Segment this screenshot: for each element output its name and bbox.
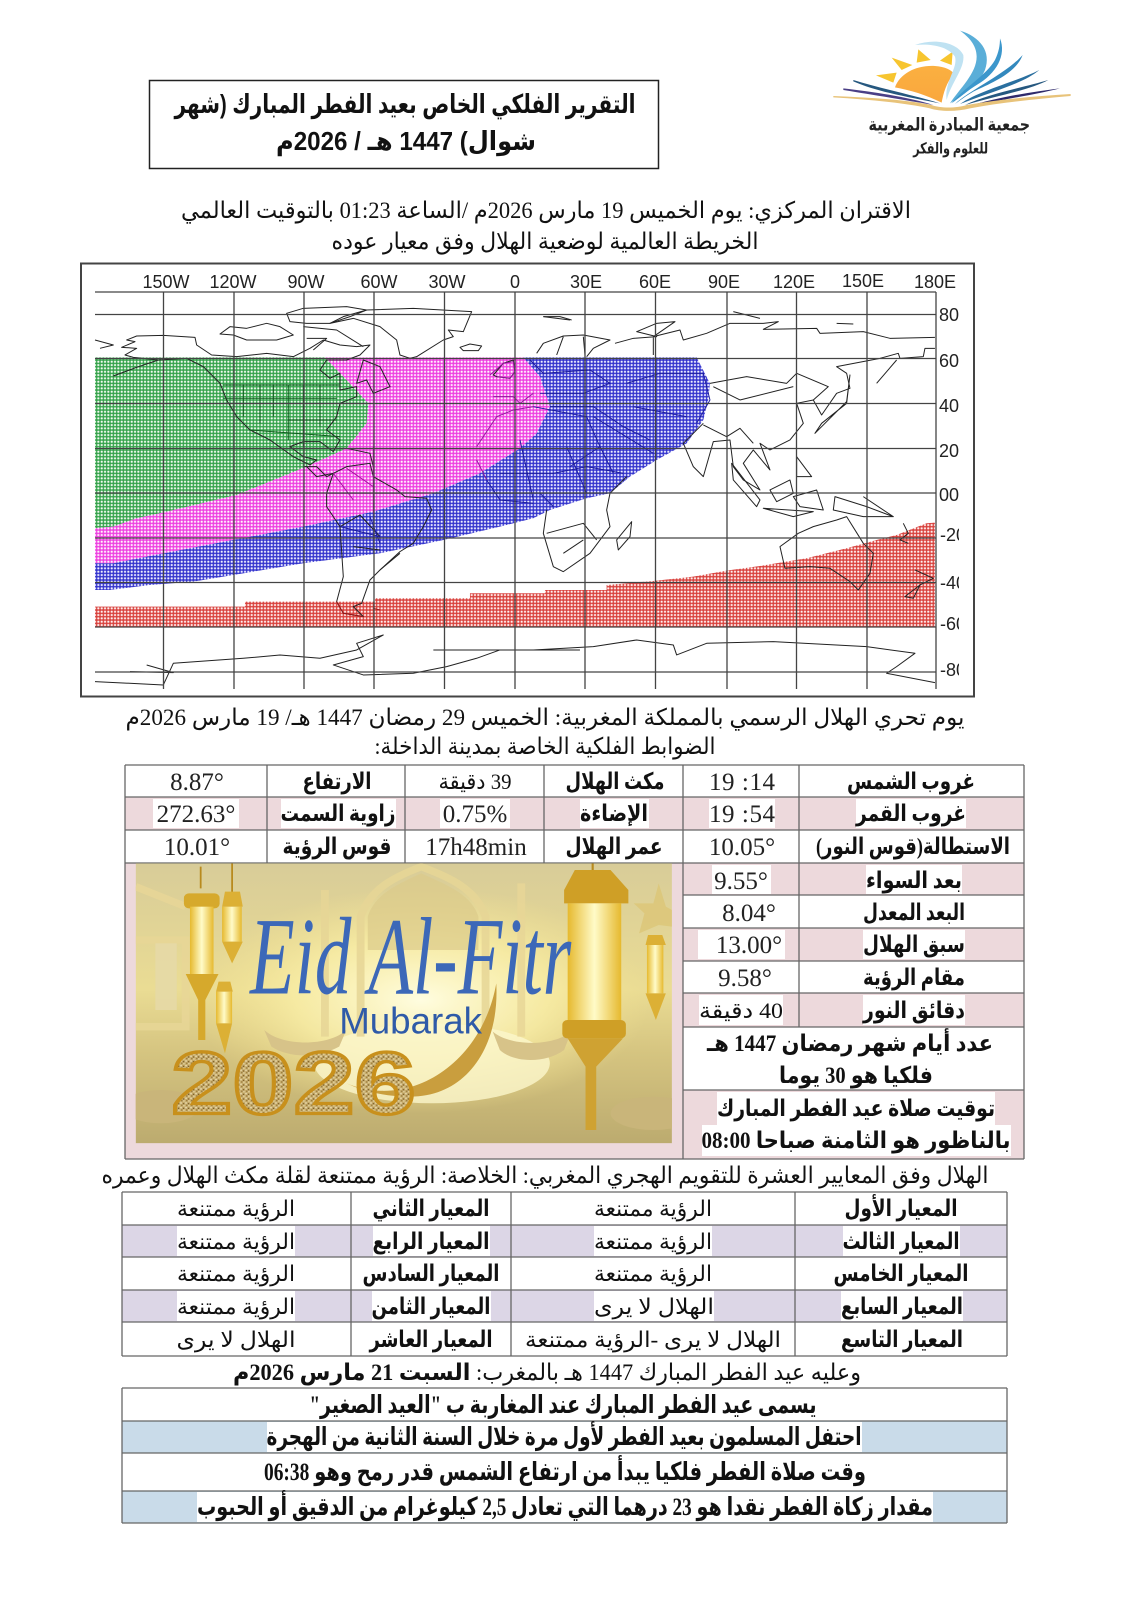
latitude labels: -80: [940, 660, 966, 680]
longitude labels: 0: [510, 272, 520, 292]
zone: green: [95, 357, 368, 528]
latitude labels: 20: [939, 441, 959, 461]
row: criteria 3 and 4: الرؤية ممتنعة: [177, 1229, 295, 1254]
text: map heading: الخريطة العالمية لوضعية الهلال وفق معيار عوده: [332, 229, 758, 255]
lavender rows: [122, 1225, 1007, 1322]
row: criteria 1 and 2: المعيار الأول: [844, 1193, 958, 1222]
row: sunset, crescent stay, altitude: [170, 769, 975, 796]
row: Eid prayer time: توقيت صلاة عيد الفطر المبارك: [717, 1096, 995, 1122]
row: criteria 3 and 4: المعيار الرابع: [372, 1229, 490, 1255]
row: criteria 5 and 6: المعيار السادس: [362, 1261, 500, 1287]
table: crescent parameters: [125, 765, 1024, 1159]
longitude labels: 90W: [287, 272, 325, 292]
map graticule: [95, 292, 936, 689]
bowls: [264, 1030, 571, 1060]
row: elongation, moon age, arc of vision: عمر الهلال: [566, 834, 662, 860]
row: elongation, moon age, arc of vision: 10.05°: [709, 834, 775, 861]
row: adjusted distance: [722, 900, 965, 927]
row: criteria 3 and 4: الرؤية ممتنعة: [594, 1229, 712, 1254]
icon: open book: [833, 80, 1071, 111]
row: criteria 1 and 2: [177, 1193, 958, 1222]
row: adjusted distance: 8.04°: [722, 900, 776, 927]
row: criteria 9 and 10: المعيار العاشر: [369, 1327, 492, 1353]
crescent: [346, 983, 497, 1097]
latitude labels: -20: [940, 525, 966, 545]
table: Eid facts: [122, 1388, 1007, 1523]
pink row backgrounds: [125, 797, 1024, 1159]
row: Eid prayer time: بالناظور هو الثامنة صباحا 08:00: [702, 1128, 1010, 1154]
coastlines east: [433, 312, 935, 683]
zone: blue: [95, 357, 710, 590]
row: criteria 7 and 8: الرؤية ممتنعة: [177, 1294, 295, 1319]
blue rows: [122, 1421, 1007, 1523]
visibility zones: [95, 357, 935, 627]
row: criteria 5 and 6: الرؤية ممتنعة: [594, 1261, 712, 1286]
table rules: [125, 765, 1024, 1159]
left lanterns: [155, 863, 243, 1053]
longitude labels: 150W: [142, 272, 190, 292]
row: elongation, moon age, arc of vision: الاستطالة(قوس النور): [816, 834, 1010, 860]
row: adjusted distance: البعد المعدل: [863, 900, 965, 925]
text: ten criteria conclusion: الهلال وفق المعايير العشرة للتقويم الهجري المغربي: الخلاصة: الرؤية ممتنعة لقلة مكث الهلال وعمره: [102, 1163, 988, 1189]
row: sunset, crescent stay, altitude: مكث الهلال: [566, 769, 664, 795]
longitude labels: 120W: [209, 272, 257, 292]
longitude labels: 30E: [570, 272, 602, 292]
row: criteria 5 and 6: [177, 1261, 968, 1287]
row: elongation, moon age, arc of vision: [164, 834, 1010, 861]
row: criteria 7 and 8: [177, 1294, 963, 1320]
row: criteria 9 and 10: الهلال لا يرى: [176, 1327, 296, 1352]
fact: Eid name: يسمى عيد الفطر المبارك عند المغاربة ب "العيد الصغير": [310, 1392, 816, 1420]
row: moonset, illumination, azimuth: 19 :54: [709, 801, 776, 828]
fact: prayer time: وقت صلاة الفطر فلكيا يبدأ من ارتفاع الشمس قدر رمح وهو 06:38: [264, 1455, 866, 1487]
latitude labels: 60: [939, 351, 959, 371]
latitude labels: 40: [939, 396, 959, 416]
longitude labels: 60W: [360, 272, 398, 292]
row: criteria 1 and 2: الرؤية ممتنعة: [177, 1196, 295, 1221]
zone: magenta: [95, 357, 550, 563]
row: moonset, illumination, azimuth: الإضاءة: [580, 801, 648, 826]
white text highlights: [153, 799, 1011, 1156]
coastlines west: [95, 307, 580, 685]
world map: crescent visibility: [81, 264, 974, 696]
row: criteria 3 and 4: المعيار الثالث: [842, 1229, 960, 1255]
fact: zakat amount: مقدار زكاة الفطر نقدا هو 23 درهما التي تعادل 2,5 كيلوغرام من الدقيق أو الحبوب: [197, 1490, 933, 1522]
longitude labels: 60E: [639, 272, 671, 292]
text: Eid date in Morocco: وعليه عيد الفطر المبارك 1447 هـ بالمغرب: السبت 21 مارس 2026م: [233, 1360, 861, 1386]
fact: first celebration: احتفل المسلمون بعيد الفطر لأول مرة خلال السنة الثانية من الهجرة: [266, 1421, 862, 1452]
row: crescent lead: سبق الهلال: [863, 932, 965, 958]
logo name text: جمعية المبادرة المغربية: [868, 115, 1030, 136]
longitude labels: 30W: [428, 272, 466, 292]
right lanterns: [562, 863, 672, 1130]
row: sawaa distance: [714, 868, 962, 895]
row: criteria 7 and 8: المعيار الثامن: [372, 1294, 490, 1320]
row: light minutes: [699, 998, 965, 1024]
row: sighting position: مقام الرؤية: [863, 965, 965, 991]
row: sunset, crescent stay, altitude: الارتفاع: [302, 769, 372, 795]
row: criteria 9 and 10: الهلال لا يرى -الرؤية ممتنعة: [525, 1327, 781, 1352]
title box: التقرير الفلكي الخاص بعيد الفطر المبارك (شهر: [173, 89, 636, 120]
row: sunset, crescent stay, altitude: 19 :14: [709, 769, 776, 796]
row: sunset, crescent stay, altitude: 39 دقيقة: [438, 769, 512, 794]
longitude labels: 180E: [914, 272, 956, 292]
row: light minutes: دقائق النور: [862, 998, 965, 1024]
white text highlights: [177, 1226, 963, 1321]
row: Ramadan days: عدد أيام شهر رمضان 1447 هـ: [706, 1027, 993, 1057]
row: criteria 5 and 6: الرؤية ممتنعة: [177, 1261, 295, 1286]
2026 gold numerals: 2026: [171, 1034, 416, 1133]
longitude labels: 150E: [842, 271, 884, 291]
row: Ramadan days: فلكيا هو 30 يوما: [779, 1063, 933, 1089]
Eid Al-Fitr script: Eid Al-Fitr: [249, 895, 572, 1017]
title box: [150, 80, 658, 168]
table rules: [122, 1192, 1007, 1356]
logo name text: [868, 115, 1030, 157]
soft clouds: [136, 1094, 137, 1120]
row: light minutes: 40 دقيقة: [699, 998, 783, 1023]
image: Eid Al-Fitr Mubarak 2026 greeting: [121, 863, 696, 1143]
row: elongation, moon age, arc of vision: 10.01°: [164, 834, 230, 861]
white text highlights: [197, 1422, 933, 1522]
table: ten criteria: [122, 1192, 1007, 1356]
row: moonset, illumination, azimuth: 0.75%: [443, 801, 507, 828]
row: elongation, moon age, arc of vision: 17h48min: [425, 834, 527, 861]
arch: [136, 867, 521, 1037]
row: elongation, moon age, arc of vision: قوس الرؤية: [282, 834, 392, 860]
icon: sun: [876, 49, 954, 103]
text: Dakhla parameters heading: الضوابط الفلكية الخاصة بمدينة الداخلة:: [374, 734, 716, 760]
row: moonset, illumination, azimuth: غروب القمر: [855, 801, 966, 827]
row: criteria 9 and 10: المعيار التاسع: [841, 1327, 963, 1353]
row: moonset, illumination, azimuth: [157, 801, 966, 828]
latitude labels: 80: [939, 305, 959, 325]
row: sawaa distance: 9.55°: [714, 868, 768, 895]
row: criteria 5 and 6: المعيار الخامس: [834, 1261, 968, 1287]
Mubarak: Mubarak: [339, 1001, 483, 1042]
icon: blue feathers: [915, 31, 1060, 107]
table rules: [122, 1388, 1007, 1523]
latitude labels: -40: [940, 573, 966, 593]
row: crescent lead: 13.00°: [716, 932, 782, 959]
latitude labels: 00: [939, 485, 959, 505]
title box: شوال) 1447 هـ / 2026م: [276, 126, 536, 157]
row: criteria 1 and 2: الرؤية ممتنعة: [594, 1196, 712, 1221]
row: sighting position: 9.58°: [718, 965, 772, 992]
row: criteria 3 and 4: [177, 1229, 960, 1255]
longitude labels: 90E: [708, 272, 740, 292]
text: official crescent sighting day: يوم تحري الهلال الرسمي بالمملكة المغربية: الخميس 29 رمضان 1447 هـ/ 19 مارس 2026م: [125, 705, 964, 731]
row: criteria 7 and 8: الهلال لا يرى: [594, 1294, 714, 1319]
longitude labels: 120E: [773, 272, 815, 292]
row: sighting position: [718, 965, 965, 992]
latitude labels: [939, 308, 959, 676]
row: criteria 1 and 2: المعيار الثاني: [372, 1196, 490, 1222]
logo: association emblem: [833, 31, 1071, 157]
row: Eid prayer time: [702, 1096, 1010, 1154]
row: crescent lead: [716, 932, 965, 959]
row: sunset, crescent stay, altitude: غروب الشمس: [847, 769, 975, 795]
row: moonset, illumination, azimuth: 272.63°: [157, 801, 235, 828]
row: sunset, crescent stay, altitude: 8.87°: [170, 769, 224, 796]
longitude labels: [142, 271, 956, 292]
row: sawaa distance: بعد السواء: [866, 868, 962, 894]
latitude labels: -60: [940, 614, 966, 634]
row: moonset, illumination, azimuth: زاوية السمت: [280, 801, 396, 827]
row: Ramadan days: [706, 1027, 993, 1089]
row: criteria 9 and 10: [176, 1327, 963, 1353]
logo name text: للعلوم والفكر: [912, 140, 988, 157]
row: criteria 7 and 8: المعيار السابع: [841, 1294, 963, 1320]
text: conjunction date: الاقتران المركزي: يوم الخميس 19 مارس 2026م /الساعة 01:23 بالتوقيت العالمي: [181, 198, 911, 224]
zone: red: [95, 523, 935, 627]
